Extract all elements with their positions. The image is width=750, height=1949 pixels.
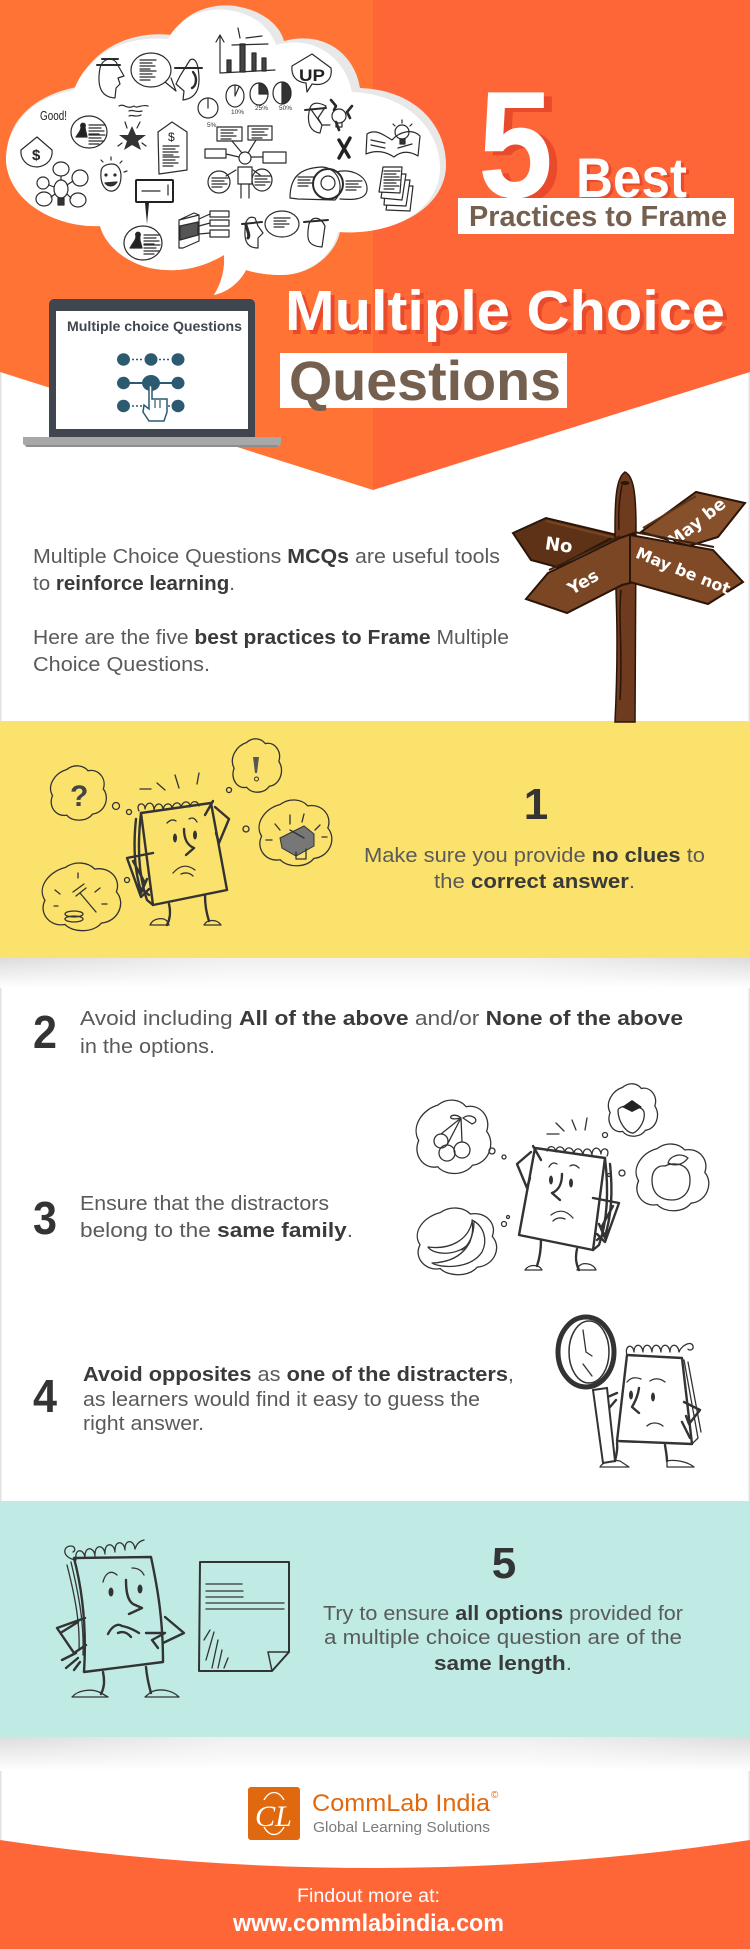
- practice 3: 3: [33, 1192, 57, 1244]
- logo mark: CL: [255, 1800, 292, 1833]
- post: [615, 472, 636, 722]
- magnifying glass: [558, 1317, 615, 1463]
- sign: No: No: [544, 533, 574, 558]
- sign: May be not: [630, 532, 743, 604]
- intro text: to reinforce learning.: [33, 573, 235, 595]
- yellow band: practice 1: [0, 721, 750, 958]
- title: Multiple Choice: Multiple Choice: [289, 283, 729, 347]
- sketch: data box: [179, 211, 229, 248]
- emphasis dashes: [140, 773, 199, 790]
- sketch: notes: [119, 105, 148, 116]
- sketch: dollar house badge: $: [32, 147, 41, 164]
- practice 4: 4: [33, 1370, 57, 1422]
- title: 5 Best: 5: [486, 64, 561, 234]
- sketch: mind-map person: [205, 126, 286, 198]
- sketch: pie charts: 25%: [255, 105, 268, 112]
- illustration: notepad with question, idea and money thoughts: [42, 739, 332, 931]
- thought cloud with sketches: [6, 5, 446, 295]
- sketch: pie charts: [198, 82, 292, 129]
- practice 3: Ensure that the distractors: [80, 1193, 329, 1215]
- intro text: Here are the five best practices to Frame Multiple: [33, 627, 509, 649]
- number 1: 1: [524, 780, 548, 829]
- footer url: www.commlabindia.com: [232, 1910, 504, 1937]
- practice 1 text: the correct answer .: [434, 871, 635, 893]
- icon: option nodes with pointer hand: [117, 353, 184, 421]
- notepad body: [596, 1344, 701, 1467]
- header banner: [0, 0, 750, 490]
- sign: Maybe: [641, 492, 745, 552]
- teal band: practice 5: [0, 1501, 750, 1737]
- illustration: notepad with magnifying glass: [558, 1317, 701, 1467]
- title: 5 Best: [478, 60, 690, 234]
- sketch: sign on stem: [136, 180, 173, 224]
- practice 5 text: Try to ensure all options provided for: [323, 1603, 683, 1625]
- practice 3: belong to the same family .: [80, 1220, 353, 1242]
- thought: money: [259, 800, 332, 866]
- practice 4: as learners would find it easy to guess the: [83, 1389, 480, 1411]
- thought: question mark: ?: [70, 780, 88, 813]
- logo name: CommLab India: [312, 1790, 491, 1817]
- sketch: paper stack: [379, 167, 413, 211]
- practice 3: [33, 1192, 353, 1244]
- practice 5 text: a multiple choice question are of the: [324, 1627, 682, 1649]
- thought: cherries: [416, 1100, 491, 1174]
- sketch: dollar house badge: [21, 137, 52, 167]
- thought: bananas: [417, 1208, 497, 1275]
- shadow under teal band: [0, 1737, 750, 1771]
- thought: gavel: [42, 863, 121, 931]
- logo tagline: Global Learning Solutions: [313, 1819, 490, 1836]
- signpost: [513, 472, 745, 722]
- sign: Yes: [526, 533, 634, 613]
- practice 2: Avoid including All of the above and/or None of the above: [80, 1008, 683, 1030]
- sketch: idea network: [36, 162, 88, 207]
- laptop with multiple choice screen: [23, 299, 281, 447]
- sketch: X mark: [339, 138, 350, 158]
- thought: apple: [636, 1144, 709, 1211]
- illustration: notepad thinking of fruit: [416, 1084, 709, 1275]
- sketch: UP house badge: UP: [299, 66, 325, 85]
- paper sheet: [199, 1562, 289, 1671]
- thought: exclamation mark: [232, 739, 282, 792]
- notepad body: [57, 1540, 184, 1697]
- thought: strawberry: [608, 1084, 658, 1136]
- title: 5 Best: Best: [576, 146, 687, 209]
- sketch: dollar document: $: [168, 130, 175, 144]
- practice 1 text: Make sure you provide no clues to: [364, 845, 705, 867]
- sketch: two heads with speech bubble: [97, 53, 202, 100]
- shadow under yellow band: [0, 958, 750, 988]
- illustration: notepad with paper sheet: [57, 1540, 289, 1697]
- sketch: Good!: Good!: [40, 108, 67, 123]
- practice 2: [33, 1006, 683, 1058]
- practice 4: [33, 1364, 514, 1435]
- sketch: pie charts: 50%: [279, 105, 292, 112]
- copyright mark: ©: [491, 1790, 499, 1801]
- sketch: two heads pair: [242, 211, 328, 248]
- screen title: Multiple choice Questions: [67, 318, 242, 334]
- sign: Maybe: May be: [664, 494, 730, 552]
- intro text: [33, 546, 509, 676]
- title: Multiple Choice: Multiple Choice: [285, 279, 725, 343]
- title: Questions: Questions: [289, 349, 561, 412]
- footer banner: [0, 1840, 750, 1949]
- sign: May be not: May be not: [633, 543, 733, 599]
- sketch: boss profile bubble: [71, 116, 107, 148]
- practice 4: right answer.: [83, 1413, 204, 1435]
- sketch: boss badge: [124, 226, 162, 260]
- sketch: dollar document: [158, 122, 187, 174]
- sketch: pie charts: 10%: [231, 109, 244, 116]
- footer prompt: Findout more at:: [297, 1886, 440, 1907]
- thought: question mark: [51, 766, 106, 820]
- sketch: bar chart: [216, 28, 275, 73]
- sketch: star: [118, 122, 146, 150]
- thought bubbles: [112, 788, 249, 882]
- title: Practices to Frame: Practices to Frame: [469, 201, 727, 233]
- emphasis dashes: [547, 1118, 587, 1134]
- logo mark: [248, 1787, 300, 1840]
- title: 5 Best: Best: [579, 148, 690, 211]
- practice 5 text: same length .: [434, 1653, 572, 1675]
- practice 1 text: [364, 845, 705, 893]
- sketch: head with light bulb: [305, 100, 352, 133]
- practice 2: 2: [33, 1006, 57, 1058]
- sketch: UP house badge: [292, 54, 331, 92]
- sign: No: [513, 518, 617, 567]
- intro text: Multiple Choice Questions MCQs are useful tools: [33, 546, 500, 568]
- thought bubbles: [489, 1132, 625, 1226]
- title: 5 Best: 5: [478, 60, 553, 230]
- sketch: bubbles with bulb badge: [290, 167, 367, 200]
- practice 4: Avoid opposites as one of the distracters ,: [83, 1364, 514, 1386]
- sign: Yes: Yes: [564, 566, 603, 600]
- intro text: Choice Questions.: [33, 654, 210, 676]
- practice 5 text: [323, 1603, 683, 1675]
- number 5: 5: [492, 1539, 516, 1588]
- sketch: open book with bulb: [366, 120, 420, 157]
- sketch: pie charts: 5%: [207, 122, 217, 129]
- sketch: smiling head: [101, 157, 127, 191]
- practice 2: in the options.: [80, 1036, 215, 1058]
- logo: CommLab India: [248, 1787, 499, 1840]
